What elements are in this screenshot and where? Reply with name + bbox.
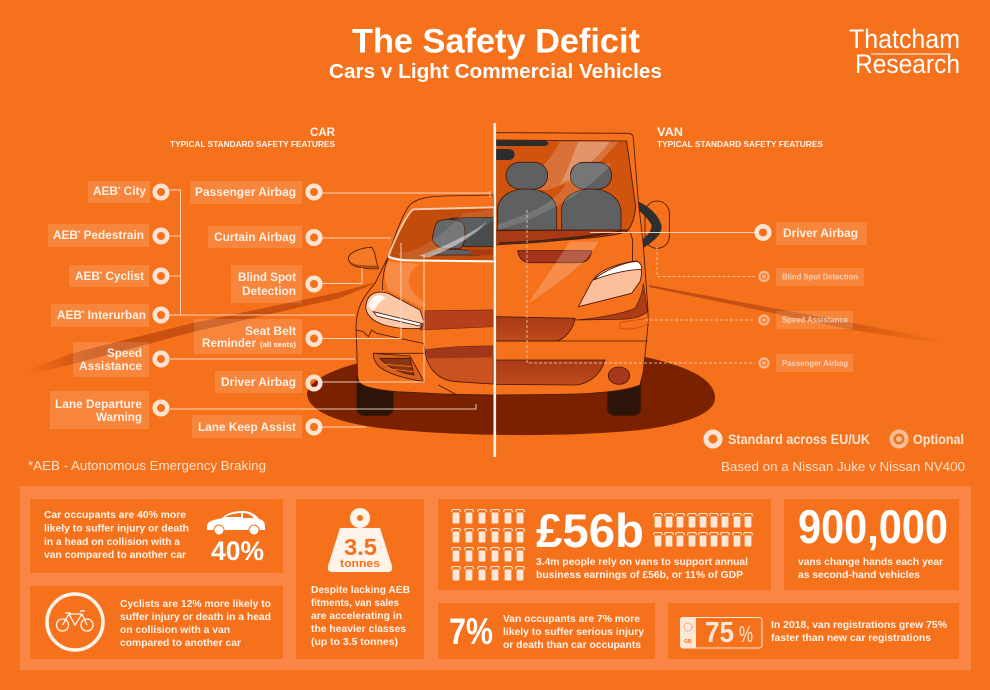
van bumper line: [496, 340, 648, 342]
feature: Lane Departure Warning: Lane Departure: [55, 399, 142, 411]
feature: Driver Airbag: Driver Airbag: [221, 377, 296, 389]
feature: Seat Belt Reminder: [194, 319, 320, 354]
stat: £56b: [438, 499, 771, 590]
feature: Blind Spot Detection: Detection: [242, 286, 296, 298]
van headlight: [578, 261, 642, 307]
van lower bumper intake: [496, 360, 605, 385]
van optional: Passenger Airbag: [760, 354, 853, 372]
stat: car occupants 40%: 40%: [211, 536, 264, 566]
title: Cars v Light Commercial Vehicles: [329, 61, 662, 83]
heading: van: VAN: [657, 125, 683, 139]
feature: Blind Spot Detection: [231, 265, 320, 303]
stats panel background: [20, 486, 971, 670]
stat: 3.5 tonnes: [296, 499, 424, 659]
stat: 3.5 tonnes: (up to 3.5 tonnes): [311, 636, 398, 648]
stat: 75%: In 2018, van registrations grew 75%: [771, 619, 948, 631]
feature: AEB Pedestrain: Pedestrain: [80, 230, 144, 242]
stat: £56b: business earnings of £56b, or 11% of GDP: [536, 569, 743, 581]
stat: 900,000: 900,000: [798, 500, 948, 553]
icon: weight: tonnes: [340, 558, 380, 570]
stat: cyclists: Cyclists are 12% more likely to: [120, 598, 271, 610]
feature: Passenger Airbag: Passenger Airbag: [195, 187, 296, 199]
stat: cyclists: suffer injury or death in a head: [120, 611, 271, 623]
title: The Safety Deficit: [352, 22, 640, 60]
heading: van: TYPICAL STANDARD SAFETY FEATURES: [657, 139, 823, 149]
van feature: Driver Airbag: [757, 222, 867, 245]
icon: bicycle in circle: [47, 594, 103, 650]
icon: weight: 3.5: [344, 534, 377, 560]
car lower bumper: [425, 346, 493, 384]
legend: [706, 432, 964, 447]
van seats: [498, 162, 621, 230]
car wheel: [357, 377, 393, 416]
stat: 900,000: as second-hand vehicles: [798, 569, 920, 581]
feature: Lane Keep Assist: Lane Keep Assist: [198, 422, 296, 434]
heading: van: [657, 125, 823, 149]
icon: car: [207, 511, 265, 535]
stat: 7%: likely to suffer serious injury: [503, 626, 644, 638]
stat: cyclists: [30, 586, 283, 659]
stat: car occupants 40%: likely to suffer injury or death: [44, 522, 189, 534]
van upper grille: [518, 251, 592, 263]
van side marker: [620, 318, 648, 329]
car callout lines: [170, 190, 490, 427]
logo: Thatcham Research: [849, 24, 960, 79]
icon: number plate: 75: [705, 617, 734, 649]
car mirror: [348, 247, 379, 269]
feature: Passenger Airbag: [190, 181, 320, 204]
van optional: Speed Assistance: [760, 311, 853, 329]
footnote: AEB: *AEB - Autonomous Emergency Braking: [28, 458, 266, 473]
stat: car occupants 40%: [30, 499, 283, 573]
van fog lamp: [608, 367, 630, 384]
heading: car: CAR: [310, 125, 335, 139]
heading: car: TYPICAL STANDARD SAFETY FEATURES: [170, 139, 335, 149]
feature: Blind Spot Detection: Blind Spot: [238, 272, 296, 284]
icon group: vans right: [654, 514, 752, 546]
feature: Seat Belt Reminder: (all seats): [260, 340, 297, 349]
icon: number plate: %: [739, 621, 753, 647]
stat: £56b: £56b: [536, 504, 644, 557]
feature: AEB City: [88, 181, 167, 203]
van scuttle and wipers: [496, 230, 633, 265]
feature: Speed Assistance: [73, 342, 167, 377]
feature: AEB Cyclist: AEB: [75, 271, 99, 283]
feature: AEB Cyclist: Cyclist: [102, 271, 144, 283]
car headlight: [366, 292, 424, 329]
feature: AEB City: *: [118, 187, 121, 193]
logo: Thatcham Research: Research: [855, 49, 960, 79]
van windscreen: [496, 140, 636, 230]
centre divider: [494, 123, 496, 457]
van feature: Driver Airbag: Driver Airbag: [783, 228, 858, 240]
stat: 900,000: [784, 499, 959, 590]
feature: Lane Keep Assist: [192, 415, 320, 438]
feature: Lane Departure Warning: Warning: [96, 412, 142, 424]
feature: AEB Interurban: Interurban: [84, 310, 146, 322]
stat: 75%: [668, 603, 959, 659]
car fog lamp: [373, 353, 424, 382]
feature: AEB Cyclist: [69, 265, 167, 287]
feature: AEB Pedestrain: *: [78, 231, 81, 237]
feature: AEB Pedestrain: AEB: [53, 230, 77, 242]
feature: Seat Belt Reminder: Reminder: [202, 338, 257, 350]
stat: 3.5 tonnes: Despite lacking AEB: [311, 584, 410, 596]
stat: 7%: [438, 603, 655, 659]
stat: 7%: Van occupants are 7% more: [503, 613, 640, 625]
road line right: [649, 285, 950, 345]
stat: car occupants 40%: van compared to another car: [44, 549, 186, 561]
icon: number plate: [680, 617, 762, 649]
stat: cyclists: compared to another car: [120, 637, 241, 649]
car bonnet highlight: [385, 262, 427, 307]
feature: AEB City: City: [120, 186, 147, 198]
feature: Speed Assistance: Speed: [107, 348, 142, 360]
car chin detail: [438, 385, 456, 394]
stat: 7%: or death than car occupants: [503, 639, 641, 651]
van callout lines: [527, 210, 755, 363]
stat: 3.5 tonnes: the heavier classes: [311, 623, 406, 635]
van bonnet highlight: [528, 242, 598, 303]
feature: AEB City: AEB: [93, 186, 117, 198]
feature: AEB Interurban: AEB: [57, 310, 81, 322]
heading: car: [170, 125, 335, 149]
stat: 900,000: vans change hands each year: [798, 556, 943, 568]
van body: [496, 133, 648, 395]
feature: Curtain Airbag: Curtain Airbag: [214, 232, 296, 244]
icon: weight: [328, 508, 392, 572]
feature: AEB Pedestrain: [48, 224, 167, 247]
car body: [356, 195, 494, 395]
road line left: [23, 282, 376, 376]
car windscreen: [388, 207, 493, 261]
feature: AEB Cyclist: *: [100, 272, 103, 278]
feature: Seat Belt Reminder: Seat Belt: [245, 326, 296, 338]
icon group: vans left: [452, 510, 524, 580]
van optional: Passenger Airbag: Passenger Airbag: [782, 359, 848, 368]
feature: Curtain Airbag: [208, 226, 320, 248]
footnote: vehicles: Based on a Nissan Juke v Nissan NV400: [721, 459, 965, 474]
car body crease: [356, 258, 425, 353]
feature: Driver Airbag: [215, 371, 320, 393]
legend: Optional: [913, 432, 964, 447]
legend: Standard across EU/UK: [728, 432, 870, 447]
van optional: Blind Spot Detection: Blind Spot Detection: [782, 272, 858, 282]
van wheel: [607, 383, 641, 416]
stat: £56b: 3.4m people rely on vans to support annual: [536, 556, 748, 568]
van optional: Speed Assistance: Speed Assistance: [782, 316, 849, 324]
van optional: Blind Spot Detection: [760, 268, 864, 286]
feature: AEB Interurban: [51, 304, 167, 327]
van mirror: [638, 201, 669, 249]
logo: Thatcham Research: Thatcham: [849, 24, 960, 54]
feature: AEB Interurban: *: [82, 311, 85, 317]
stat: 3.5 tonnes: fitments, van sales: [311, 597, 399, 609]
van body shading: [575, 283, 648, 320]
vehicle illustration: half car half van: [348, 133, 669, 416]
stat: car occupants 40%: in a head on collision with a: [44, 536, 180, 548]
stat: 3.5 tonnes: are accelerating in: [311, 610, 402, 622]
car grille: [420, 310, 493, 330]
stat: cyclists: on collision with a van: [120, 624, 230, 636]
stat: 7%: 7%: [449, 611, 493, 652]
icon: number plate: GB: [684, 639, 692, 645]
stat: car occupants 40%: Car occupants are 40% more: [44, 509, 186, 521]
feature: Lane Departure Warning: [50, 391, 167, 429]
ground shadow: [307, 356, 715, 435]
title: [329, 22, 662, 83]
feature: Speed Assistance: Assistance: [79, 361, 142, 373]
van lower grille: [496, 317, 575, 341]
stat: 75%: faster than new car registrations: [771, 632, 931, 644]
